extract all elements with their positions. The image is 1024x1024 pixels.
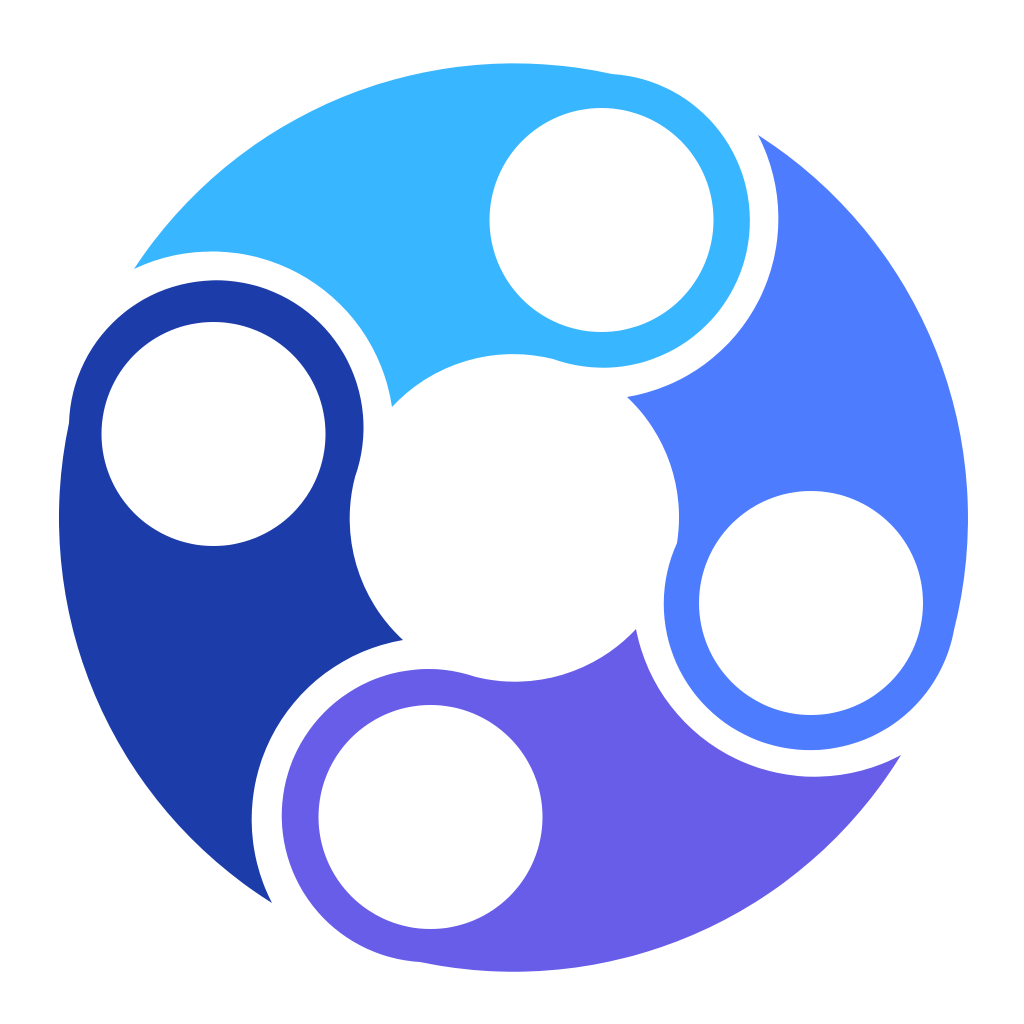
placeholder circle: dark blue segment	[102, 322, 326, 546]
segment: light blue	[134, 63, 750, 407]
placeholder circle: blue segment	[699, 491, 923, 715]
placeholder circle: light blue segment	[490, 108, 714, 332]
placeholder circle: purple segment	[318, 705, 542, 929]
segment: dark blue	[59, 280, 403, 903]
segment: blue	[627, 135, 968, 750]
segment: purple	[282, 629, 901, 972]
